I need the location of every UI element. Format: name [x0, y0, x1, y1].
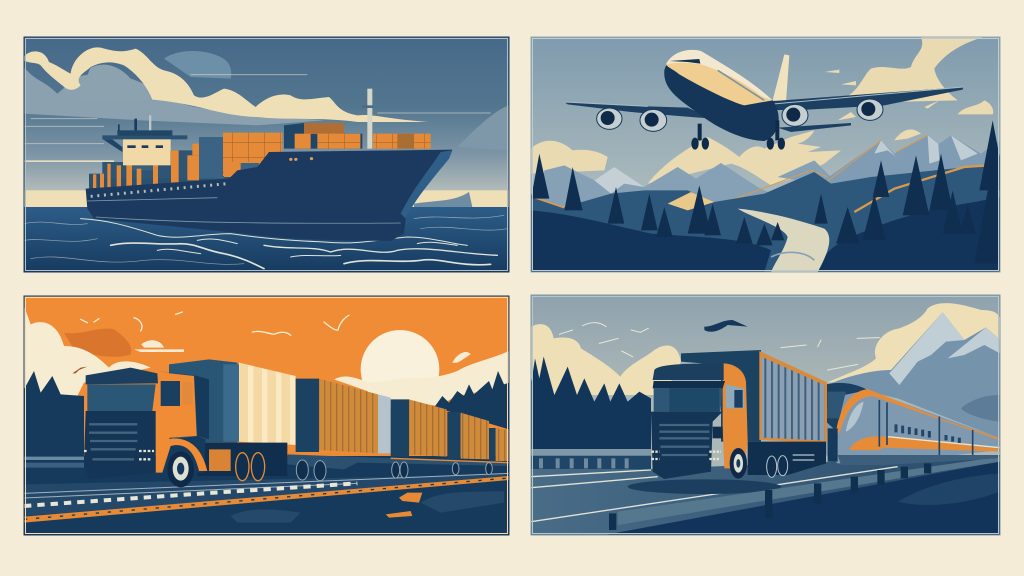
birds [81, 312, 349, 335]
sun [361, 330, 439, 409]
truck cab [84, 368, 209, 487]
left guard rail [531, 449, 651, 456]
landing gear [691, 120, 785, 150]
engines [597, 99, 883, 131]
road [531, 455, 1000, 535]
roadside guard rail [618, 457, 1000, 525]
tail [773, 54, 789, 102]
truck cab [651, 363, 748, 479]
sea [24, 207, 509, 272]
ground [24, 456, 509, 535]
far mountains [542, 160, 830, 206]
panel border [531, 37, 1000, 272]
hills [531, 164, 1000, 272]
train [826, 383, 1000, 465]
clouds [24, 47, 509, 150]
wings [565, 102, 704, 118]
mountains [831, 312, 1000, 438]
horizon band [24, 190, 509, 209]
forest [24, 371, 84, 459]
clouds [531, 303, 1000, 395]
panel: airplane over mountains [531, 37, 1011, 272]
trailer [681, 350, 827, 477]
birds [559, 323, 879, 370]
containers [89, 123, 431, 188]
panel: truck with trailers on rail at sunset [24, 296, 509, 535]
chassis [197, 443, 509, 481]
panel border [24, 37, 509, 272]
airplane [564, 50, 963, 150]
clouds [24, 306, 509, 406]
trees [531, 120, 1011, 264]
forest [531, 357, 651, 452]
panel: container ship at sea [24, 37, 509, 272]
clouds [531, 37, 993, 185]
panel: truck and train on highway [531, 295, 1000, 535]
bridge [102, 115, 187, 165]
waves [24, 215, 507, 269]
trailers [169, 359, 509, 461]
panel border [24, 296, 509, 535]
right ground [604, 462, 1000, 535]
river [738, 209, 829, 272]
hull [86, 150, 452, 241]
panel border [531, 295, 1000, 535]
railway track [24, 473, 509, 523]
fuselage [664, 50, 779, 141]
